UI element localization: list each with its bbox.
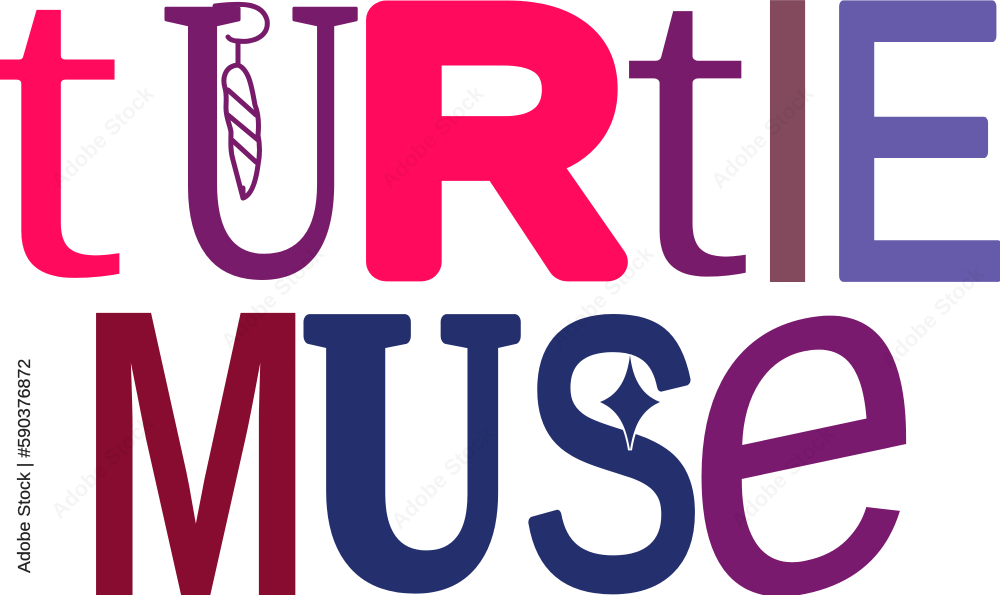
watermark pattern: Adobe Stock (876, 260, 989, 374)
watermark pattern (46, 80, 989, 534)
watermark pattern: Adobe Stock (376, 80, 489, 194)
watermark pattern: Adobe Stock (46, 410, 159, 524)
watermark pattern: Adobe Stock (726, 420, 839, 534)
icon: four-point star (600, 355, 660, 450)
watermark pattern: Adobe Stock (216, 240, 329, 354)
watermark pattern: Adobe Stock (386, 420, 499, 534)
icon: unicorn horn hanging from hook (215, 4, 267, 198)
watermark pattern: Adobe Stock (706, 80, 819, 194)
heading: TURTLE (0, 0, 1000, 367)
stock id side label: Adobe Stock | #590376872 (14, 359, 34, 573)
watermark pattern: Adobe Stock (546, 240, 659, 354)
heading: MUSE (77, 108, 925, 595)
watermark pattern: Adobe Stock (46, 80, 159, 194)
